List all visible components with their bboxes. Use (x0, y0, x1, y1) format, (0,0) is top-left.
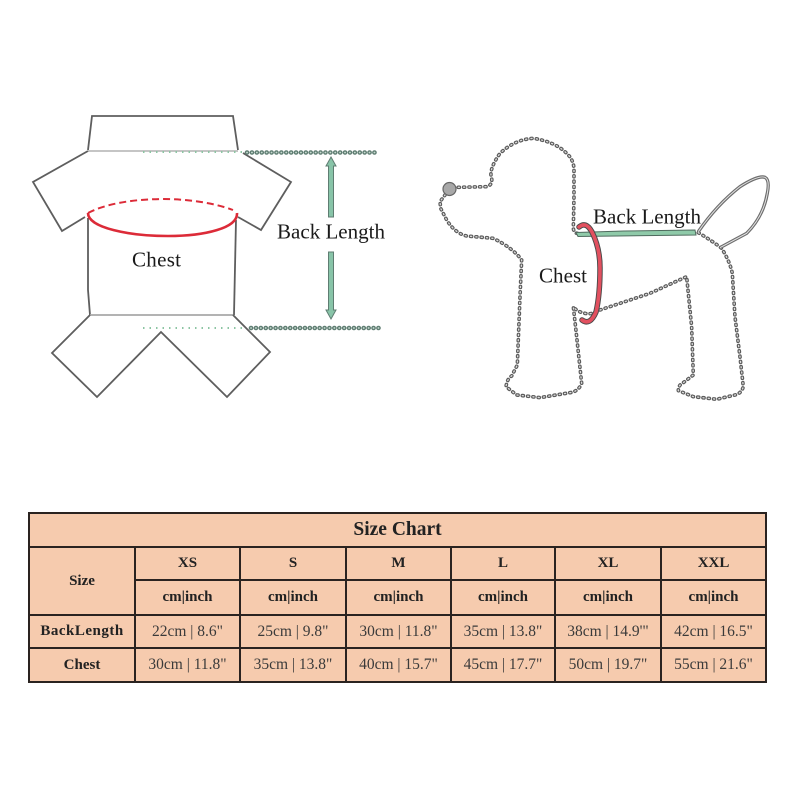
size names row: M (391, 555, 406, 571)
down arrow (326, 252, 336, 319)
garment outline (33, 116, 291, 397)
dog tail (698, 177, 768, 247)
chest row: 50cm | 19.7" (569, 656, 647, 673)
up arrow (326, 157, 336, 217)
back length row: 30cm | 11.8" (359, 623, 438, 640)
back length row: BackLength (40, 623, 124, 639)
label: chest on dog: Chest (539, 264, 587, 288)
chest row: 40cm | 15.7" (359, 656, 438, 673)
dog nose (443, 182, 456, 196)
back length row: 25cm | 9.8" (258, 623, 328, 640)
chest row: 55cm | 21.6" (674, 656, 753, 673)
dog tail inner highlight (698, 177, 768, 247)
back length bar on dog (576, 230, 696, 236)
size chart table (28, 512, 767, 683)
units row: cm|inch (478, 589, 528, 605)
units row: cm|inch (374, 589, 423, 605)
back length row (40, 623, 753, 640)
units row: cm|inch (689, 589, 738, 605)
label: back length on dog: Back Length (593, 204, 702, 228)
units row (163, 589, 738, 605)
units row: cm|inch (268, 589, 318, 605)
chest row (64, 656, 753, 673)
diagram: garment and dog measurement illustrations (32, 115, 770, 401)
bottom back length guide line (143, 327, 379, 329)
back length row: 38cm | 14.9'" (567, 623, 649, 640)
size names row: XS (178, 555, 197, 571)
label: chest on garment: Chest (132, 248, 181, 272)
size names row: XL (598, 555, 618, 571)
dog outline (440, 138, 743, 399)
top back length guide line (143, 151, 379, 154)
size names row: S (289, 555, 297, 571)
size names row: XXL (698, 555, 729, 571)
units row: cm|inch (163, 589, 212, 605)
chest row: 45cm | 17.7" (464, 656, 542, 673)
chest row: Chest (64, 656, 100, 672)
label: back length on garment: Back Length (277, 220, 386, 244)
chest row: 35cm | 13.8" (254, 656, 332, 673)
table title row: Size Chart (353, 519, 442, 540)
table title row (40, 519, 753, 673)
size names row: L (498, 555, 508, 571)
chest loop on dog (579, 225, 600, 322)
back length row: 22cm | 8.6" (152, 623, 223, 640)
chest row: 30cm | 11.8" (148, 656, 227, 673)
units row: cm|inch (583, 589, 633, 605)
table title row: Size (69, 572, 95, 588)
back length row: 35cm | 13.8" (464, 623, 542, 640)
chest measurement loop on garment (88, 199, 237, 236)
back length row: 42cm | 16.5" (674, 623, 753, 640)
size names row (69, 555, 729, 588)
